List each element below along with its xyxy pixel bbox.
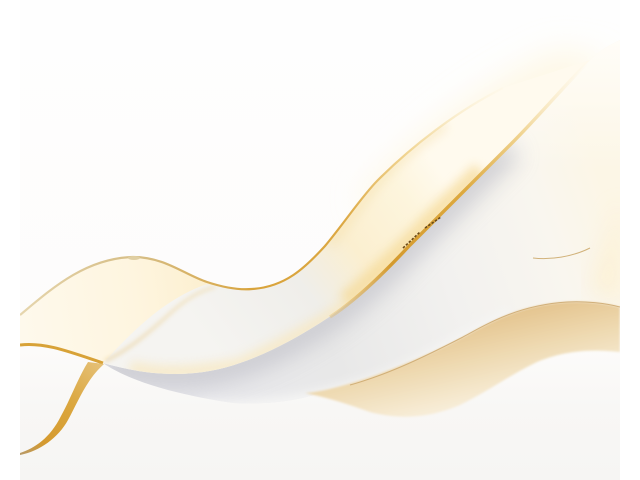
small highlight on peak	[128, 256, 140, 260]
gold top line	[20, 88, 503, 315]
cream left sheet	[20, 258, 218, 362]
soft inner gold fold	[105, 287, 215, 361]
gold lower line right	[329, 76, 576, 318]
gold loop ribbon	[20, 362, 104, 455]
thin wisp line	[533, 248, 590, 259]
background	[20, 385, 620, 480]
gold lower line left	[20, 344, 103, 363]
central sheet	[104, 116, 504, 374]
tan wave upper edge	[350, 302, 620, 385]
grey ribbon sheet	[103, 40, 620, 408]
dark speckle on gold line	[403, 217, 441, 248]
warm glow behind waves	[367, 47, 593, 190]
tan lower wave	[305, 302, 620, 417]
